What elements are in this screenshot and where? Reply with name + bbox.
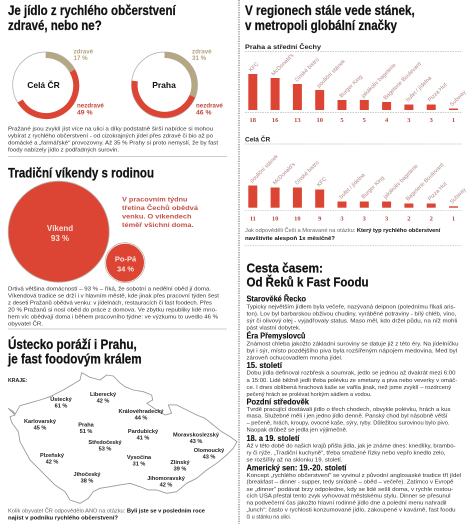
bubble: Víkend 93 % bbox=[8, 181, 109, 282]
region labels: Zlínský bbox=[170, 460, 191, 466]
timeline: Americký sen: (breakfast – dinner - supper, tedy snídaně – oběd – večeře). Zatímco v Evropě bbox=[246, 480, 454, 486]
timeline: Éra Přemyslovců bbox=[246, 332, 458, 362]
values: 1 bbox=[452, 117, 455, 124]
region labels: Olomoucký bbox=[194, 448, 225, 454]
heading: healthy or not: zdravé, nebo ne? bbox=[8, 18, 102, 33]
timeline: Éra Přemyslovců: Éra Přemyslovců bbox=[246, 332, 306, 340]
map: Czech Republic regions bbox=[8, 373, 237, 503]
heading: regions vs metropolis: V regionech stále vede stánek, bbox=[245, 3, 415, 18]
timeline: 18. a 19. století bbox=[246, 434, 456, 464]
rotated category labels: pouliční stánek bbox=[316, 59, 347, 89]
values: 3 bbox=[430, 117, 434, 124]
timeline: Americký sen: či u stánku na ulici. bbox=[246, 515, 292, 521]
region labels: Jihomoravský bbox=[147, 476, 186, 482]
timeline: Americký sen: na podvečerní čas jakožto hlavní rodinné jídlo dne a polední menu nahradil bbox=[246, 501, 446, 507]
region labels: 31 % bbox=[133, 462, 145, 468]
rotated category labels: bufet / jídelna bbox=[339, 172, 367, 200]
heading: Ústecko beats Prague bbox=[7, 337, 142, 366]
region labels: 39 % bbox=[174, 466, 186, 472]
rotated category labels: Pizza Hut bbox=[427, 82, 449, 103]
text block: Prague commentary: Pražané jsou zvyklí jíst více na ulici a díky podstatně širší nabídce si mohou bbox=[8, 126, 213, 132]
text block: map question: Kolik obyvatel ČR odpovědělo ANO na otázku: Byli jste se v posledním roce bbox=[8, 508, 205, 514]
timeline: 18. a 19. století: Až v této době do našich krajů přišla jídla, jak je známe dnes: knedlíky, brambo- bbox=[246, 443, 456, 450]
rotated category labels: bufet / jídelna bbox=[405, 75, 434, 103]
heading: regions vs metropolis bbox=[245, 3, 415, 33]
text block: chart question: Jak odpověděli Češi a Moravané na otázku: Který typ rychlého občerstvení bbox=[245, 227, 441, 234]
text block: chart question bbox=[245, 227, 441, 242]
rotated category labels: Bageterie Boulevard bbox=[383, 61, 423, 101]
region labels: 43 % bbox=[190, 439, 202, 445]
timeline: 15. století: 15. století bbox=[246, 361, 283, 370]
timeline: Americký sen: Americký sen: 19.-20. století bbox=[246, 464, 347, 472]
region labels: Ústecký bbox=[50, 396, 73, 403]
heading: journey through time: Cesta časem: bbox=[246, 261, 323, 276]
region labels: 45 % bbox=[34, 426, 46, 432]
rotated category labels: McDonald's bbox=[272, 161, 297, 186]
timeline: Pozdní středověk: Pozdní středověk bbox=[246, 398, 310, 406]
label: unhealthy 49 % bbox=[77, 102, 104, 116]
heading: healthy or not bbox=[8, 3, 177, 33]
bubble: Po-Pá 34 %: 34 % bbox=[117, 264, 134, 274]
timeline: Starověké Řecko: Starověké Řecko bbox=[246, 294, 306, 304]
values: 3 bbox=[385, 216, 389, 222]
label: unhealthy 46 %: nezdravé bbox=[196, 102, 223, 110]
text block: map question: najíst v podniku rychlého občerstvení? bbox=[8, 516, 119, 522]
region labels: Středočeský bbox=[88, 440, 123, 446]
timeline: 15. století: ce. I dnes oblíbená hrachová kaše se vařila jinak, než jsme zvyklí – rozdrcený bbox=[246, 385, 451, 391]
heading: regions vs metropolis: v metropoli globální značky bbox=[245, 18, 397, 33]
values: 3 bbox=[407, 117, 411, 124]
donut chart: Praha bbox=[132, 48, 223, 118]
values: 10 bbox=[272, 216, 278, 222]
values: 9 bbox=[318, 216, 322, 222]
timeline: 15. století: Dobu jídla definoval rozbřesk a soumrak, jedlo se jednou až dvakrát mezi 6:00 bbox=[246, 371, 456, 377]
map outline bbox=[8, 373, 237, 503]
label: unhealthy 46 %: 46 % bbox=[196, 110, 212, 116]
label: healthy 17 %: 17 % bbox=[74, 55, 88, 62]
bubble: Po-Pá 34 %: Po-Pá bbox=[115, 254, 137, 264]
values: 2 bbox=[430, 216, 433, 222]
heading: journey through time bbox=[246, 261, 369, 290]
region labels: Karlovarský bbox=[24, 419, 57, 425]
text block: weekend commentary: Víkendová tradice se drží i v hlavním městě, kde jinak přes pracovní týden šest bbox=[8, 293, 219, 299]
timeline: Americký sen: cích USA přestal tento zvyk vyhovovat městskému stylu. Dinner se přesunul bbox=[246, 494, 450, 500]
bars bbox=[248, 186, 458, 208]
values: 5 bbox=[340, 117, 344, 124]
donut label: Praha: Praha bbox=[152, 80, 176, 90]
heading: Ústecko beats Prague: Ústecko poráží i Prahu, bbox=[8, 337, 137, 352]
rotated category labels: KFC bbox=[316, 176, 328, 188]
label: healthy 17 % bbox=[74, 48, 94, 62]
region labels: 41 % bbox=[137, 436, 149, 442]
bars bbox=[248, 74, 458, 110]
rotated category labels: McDonald's bbox=[271, 52, 296, 77]
text block: weekend commentary: 20 % Pražanů si nosí oběd do práce z domova. Ve zbytku republiky lidé mno- bbox=[8, 306, 217, 313]
text block: weekend commentary: Drtivá většina domácností – 93 % – říká, že sobotní a nedělní oběd jí doma. bbox=[8, 286, 211, 292]
bubble: Po-Pá 34 % bbox=[105, 243, 145, 283]
timeline: 15. století bbox=[246, 361, 457, 398]
text block: weekend commentary bbox=[8, 286, 219, 328]
callout: working week: téměř všichni doma. bbox=[122, 222, 194, 229]
rotated category labels: pouliční stánek bbox=[249, 154, 280, 184]
donut label: Celá ČR: Celá ČR bbox=[27, 79, 60, 90]
text block: weekend commentary: obyvatel ČR. bbox=[8, 320, 43, 328]
values: 13 bbox=[294, 117, 301, 124]
label: unhealthy 46 % bbox=[196, 102, 223, 116]
region labels: 44 % bbox=[135, 416, 147, 422]
region labels: Moravskoslezský bbox=[173, 432, 220, 438]
region labels: 38 % bbox=[81, 478, 93, 484]
bubble: Víkend 93 %: Víkend bbox=[47, 224, 73, 233]
rotated category labels: jakákoliv bageterie bbox=[360, 62, 398, 100]
timeline: Starověké Řecko bbox=[246, 294, 457, 332]
bar chart: Celá ČR: Celá ČR bbox=[245, 134, 271, 144]
region labels: 51 % bbox=[80, 429, 92, 435]
region labels: Liberecký bbox=[90, 392, 117, 398]
timeline: Éra Přemyslovců: Známost chleba jakožto základní suroviny se datuje již z této éry. Na jídelníčku bbox=[246, 342, 458, 348]
values bbox=[250, 117, 455, 124]
region labels: Vysočina bbox=[127, 455, 152, 461]
timeline: Americký sen: se „dinner“ podávat brzy odpoledne, kdy se lidé sešli doma, v rychle rostou- bbox=[246, 487, 453, 493]
region labels: 61 % bbox=[55, 404, 67, 410]
label: healthy 31 %: 31 % bbox=[192, 55, 207, 62]
values: 10 bbox=[316, 117, 323, 124]
region labels: Plzeňský bbox=[40, 453, 65, 459]
text block: weekend commentary: z deseti Pražanů obědvá venku: v jídelnách, restauracích či fast foodech. Přes bbox=[8, 299, 212, 306]
bar chart: Celá ČR bbox=[245, 134, 468, 222]
callout: working week: třetina Čechů obědvá bbox=[122, 203, 198, 212]
bar chart: Praha a střední Čechy: Praha a střední Čechy bbox=[245, 42, 321, 51]
label: healthy 31 % bbox=[192, 48, 212, 62]
rotated category labels: Burger King bbox=[361, 175, 386, 200]
callout: working week bbox=[122, 196, 198, 229]
rotated category labels: Burger King bbox=[339, 74, 364, 99]
region labels: Královéhradecký bbox=[118, 409, 164, 415]
region labels: Jihočeský bbox=[73, 472, 101, 478]
label: healthy 31 %: zdravé bbox=[192, 48, 212, 56]
timeline: Americký sen bbox=[246, 464, 461, 521]
rotated category labels: Pizza Hut bbox=[427, 181, 449, 202]
bar chart: Praha a střední Čechy bbox=[245, 42, 468, 124]
region labels: Pardubický bbox=[128, 429, 159, 435]
label: unhealthy 49 %: nezdravé bbox=[77, 102, 104, 110]
timeline: Americký sen: Koncept „rychlého občerstvení“ se vyvinul z původní anglosaské tradice tří jídel bbox=[246, 472, 461, 479]
text block: Prague commentary: vybírat z rychlého občerstvení - od cizokrajných jídel přes zdravé či bio až po bbox=[8, 134, 213, 140]
rotated category labels: Subway bbox=[449, 187, 468, 205]
timeline: Starověké Řecko: ton). Lov byl barbarskou obživou chudiny, vyráběné potraviny - bílý chléb, víno, bbox=[246, 312, 457, 318]
text block: Prague commentary: domácké a „farmářské“ provozovny. Až 35 % Prahy si proto nemyslí, že by fast bbox=[8, 140, 218, 146]
timeline: Pozdní středověk bbox=[246, 398, 451, 434]
heading: traditional weekends: Tradiční víkendy s rodinou bbox=[8, 166, 154, 180]
donut chart: Celá ČR bbox=[13, 48, 104, 118]
values: 11 bbox=[250, 216, 256, 222]
donut segment: healthy 17 % bbox=[46, 55, 72, 71]
timeline: Starověké Řecko: Typicky největším jídlem byla večeře, nazývaná deipnon (polednímu říkali aris- bbox=[246, 305, 456, 311]
rotated category labels: KFC bbox=[248, 61, 260, 73]
timeline: Starověké Řecko: sýr či olivový olej - vyjadřovaly status. Maso měl, kdo držel půdu, na níž mohli bbox=[246, 318, 457, 325]
timeline: 18. a 19. století: 18. a 19. století bbox=[246, 434, 300, 443]
region labels: 42 % bbox=[46, 460, 58, 466]
bubble: Víkend 93 %: 93 % bbox=[51, 234, 69, 243]
rotated category labels bbox=[249, 154, 468, 205]
region labels: Praha bbox=[78, 422, 95, 428]
values: 18 bbox=[250, 117, 257, 124]
donut segment: healthy 31 % bbox=[164, 55, 194, 96]
text block: Prague commentary: foody nabízely jídlo z podřadných surovin. bbox=[8, 148, 119, 154]
text block: weekend commentary: hem víc obědvají doma i během pracovního týdne: ve výzkumu to uvedlo 46 % bbox=[8, 314, 218, 320]
timeline: 18. a 19. století: ry či rýže. „Tradiční kuchyně“, třeba smažené řízky nebo vepřo knedlo zelo, bbox=[246, 451, 446, 457]
timeline: Pozdní středověk: masa. Služebné měli i jen jedno jídlo denně. Panský chod byl násobně větší bbox=[246, 414, 448, 420]
timeline: Americký sen: „lunch“: často v rychlosti konzumované jídlo, zakoupené v kavárně, fast foodu bbox=[246, 507, 456, 513]
timeline: 15. století: pečený hrách se prolévat horkým sádlem a vodou. bbox=[246, 392, 372, 398]
timeline: Pozdní středověk: Tvrdě pracující dostávali jídlo o třech chodech, obvykle polévku, hrách a kus bbox=[246, 407, 451, 413]
text block: Prague commentary bbox=[8, 126, 218, 154]
timeline: Éra Přemyslovců: byl i sýr, místo pozdějšího piva byla rozšířeným nápojem medovina. Med byl bbox=[246, 348, 457, 354]
region labels: 42 % bbox=[97, 398, 109, 404]
region labels: 42 % bbox=[160, 482, 172, 488]
region labels: 43 % bbox=[203, 454, 215, 460]
timeline: 15. století: a 15:00. Lidé běžně jedli třeba polévku ze smetany a piva nebo veverky v omáč- bbox=[246, 378, 457, 384]
callout: working week: venku. O víkendech bbox=[122, 214, 192, 220]
rotated category labels: Subway bbox=[449, 89, 468, 108]
rotated category labels: jakákoliv bageterie bbox=[382, 163, 420, 201]
values: 4 bbox=[385, 117, 389, 124]
text block: chart question: navštívíte alespoň 1x měsíčně? bbox=[245, 236, 336, 242]
values: 3 bbox=[363, 216, 367, 222]
timeline: Pozdní středověk: – pečeně, hrách, kroupy, ovocné kaše, sýry, ryby. Důležitou surovinou bylo pivo. bbox=[246, 420, 450, 427]
label: unhealthy 49 %: 49 % bbox=[77, 110, 92, 116]
donut segment: unhealthy 46 % bbox=[135, 81, 192, 115]
values: 16 bbox=[272, 117, 279, 124]
values: 5 bbox=[363, 117, 367, 124]
rotated category labels bbox=[248, 52, 468, 108]
callout: working week: V pracovním týdnu bbox=[122, 196, 188, 204]
donut segment: unhealthy 49 % bbox=[20, 71, 76, 116]
label: healthy 17 %: zdravé bbox=[74, 48, 94, 56]
heading: journey through time: Od Řeků k Fast Foodu bbox=[246, 274, 369, 290]
rotated category labels: čínské bistro bbox=[294, 160, 321, 186]
region labels: 53 % bbox=[99, 446, 111, 452]
values bbox=[250, 216, 455, 222]
rotated category labels: Bageterie Boulevard bbox=[405, 162, 445, 202]
heading: healthy or not: Je jídlo z rychlého občerstvení bbox=[8, 3, 177, 18]
timeline: Starověké Řecko: pást vlastní dobytek. bbox=[246, 326, 301, 332]
values: 3 bbox=[340, 216, 344, 222]
values: 2 bbox=[407, 216, 411, 222]
label: regions: KRAJE: bbox=[8, 378, 28, 384]
values: 1 bbox=[452, 216, 455, 222]
values: 10 bbox=[294, 216, 301, 222]
timeline: Éra Přemyslovců: zároveň ochucovadlem mnoha jídel. bbox=[246, 356, 343, 362]
timeline: 18. a 19. století: se rozšířily až na sklonku 19. století. bbox=[246, 458, 343, 464]
rotated category labels: čínské bistro bbox=[294, 57, 321, 83]
timeline: Pozdní středověk: Naopak drůbež se jedla jen výjimečně. bbox=[246, 426, 348, 434]
heading: Ústecko beats Prague: je fast foodovým králem bbox=[7, 351, 142, 366]
text block: map question bbox=[8, 508, 205, 522]
region labels bbox=[24, 392, 225, 488]
